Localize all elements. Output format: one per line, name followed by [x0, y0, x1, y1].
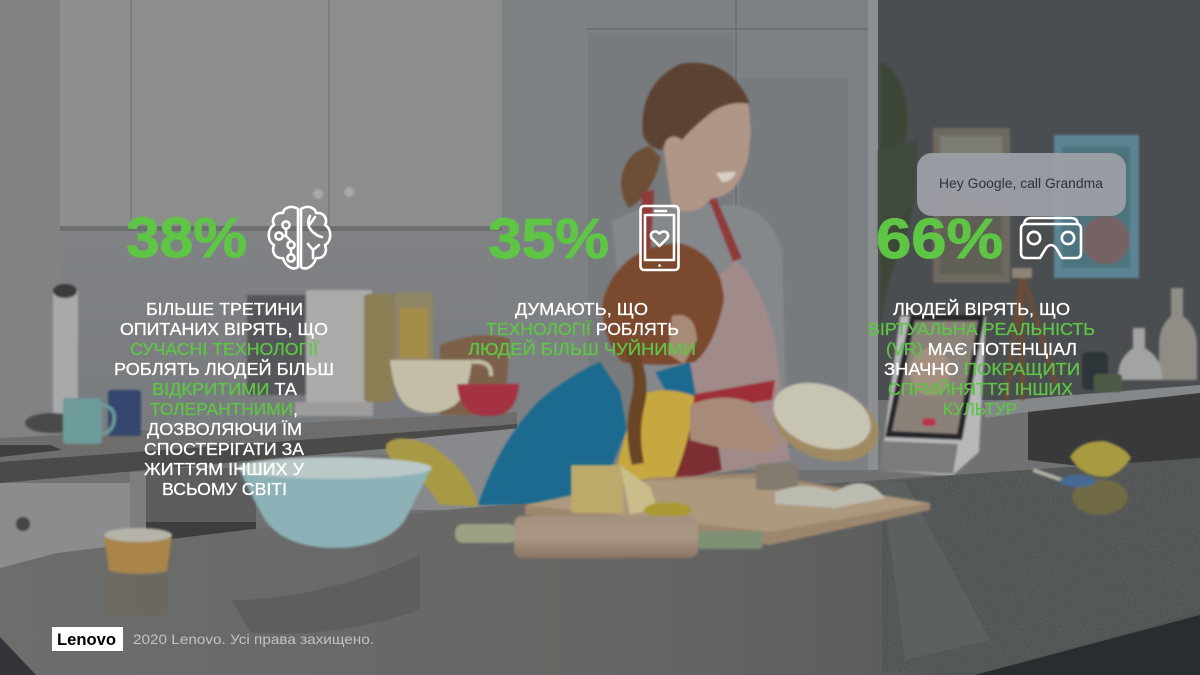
text block 3 [868, 298, 1095, 419]
text block 1: РОБЛЯТЬ ЛЮДЕЙ БІЛЬШ [114, 358, 334, 379]
icon: VR headset [1021, 218, 1081, 258]
arm and hand [690, 398, 780, 452]
text block 1: СУЧАСНІ ТЕХНОЛОГІЇ [130, 339, 318, 359]
stat column 2 [468, 206, 696, 359]
stat column 3 [868, 207, 1095, 419]
speech bubble: Hey Google [917, 153, 1126, 216]
mitten [386, 438, 478, 506]
text block 2 [468, 299, 696, 359]
neck and face [664, 80, 751, 211]
apron [675, 260, 790, 480]
girl [386, 243, 780, 506]
red bowl [457, 384, 519, 416]
stat column 1 [114, 206, 334, 499]
face [668, 315, 697, 364]
spoon [1033, 470, 1096, 487]
rolling pin [455, 516, 763, 558]
footer: Lenovo logo [52, 627, 123, 651]
white mixing bowl [390, 360, 491, 413]
coffee maker [247, 290, 373, 416]
paper towel holder [25, 284, 79, 433]
granite texture [882, 458, 1200, 672]
wall art and plant [878, 62, 1139, 330]
text block 1: БІЛЬШЕ ТРЕТИНИ [146, 299, 303, 319]
hair [642, 63, 750, 150]
text block 1: ДОЗВОЛЯЮЧИ ЇМ [147, 419, 302, 439]
back of scene objects [16, 62, 1197, 531]
braid [622, 345, 647, 465]
number: 35%: 35% [488, 207, 609, 271]
footer: copyright text: 2020 Lenovo. Усі права захищено. [133, 631, 374, 647]
text block 1: СПОСТЕРІГАТИ ЗА [144, 439, 304, 459]
text block 3: ВІРТУАЛЬНА РЕАЛЬНІСТЬ [868, 319, 1095, 339]
ramekin [104, 528, 172, 574]
apron straps [640, 190, 654, 270]
mugs [63, 390, 141, 444]
smile [716, 172, 736, 182]
counter-top objects [104, 441, 1131, 574]
text block 1: ОПИТАНИХ ВІРЯТЬ, ЩО [120, 319, 328, 339]
island counter [0, 458, 1200, 675]
smart display [880, 315, 986, 476]
cape [478, 362, 627, 505]
cutting board [525, 473, 930, 545]
footer: Lenovo logo: Lenovo [57, 630, 116, 649]
number: 38%: 38% [126, 206, 247, 270]
dough scraps [775, 483, 885, 508]
text block 2: ЛЮДЕЙ БІЛЬШ ЧУЙНИМИ [468, 338, 696, 359]
teal bowl [238, 457, 432, 548]
text block 3: СПРИЙНЯТТЯ ІНШИХ [888, 378, 1073, 399]
text block 1 [114, 299, 334, 499]
text block 3: ЗНАЧНО ПОКРАЩИТИ [884, 359, 1080, 379]
text block 3: ЛЮДЕЙ ВІРЯТЬ, ЩО [893, 298, 1070, 319]
text block 1: ТОЛЕРАНТНИМИ, [150, 399, 298, 419]
metal cup [756, 464, 798, 490]
text block 1: ВСЬОМУ СВІТІ [162, 479, 287, 499]
text block 3: (VR) МАЄ ПОТЕНЦІАЛ [886, 339, 1077, 359]
shirt [612, 205, 786, 420]
small lemon [644, 502, 692, 518]
vases [1082, 288, 1197, 392]
text block 1: ЖИТТЯМ ІНШИХ У [144, 459, 305, 479]
woman [612, 63, 790, 484]
reflection lemon [1072, 479, 1128, 515]
speech bubble: Hey Google: Hey Google, call Grandma [939, 176, 1104, 191]
butter block [571, 465, 658, 514]
icon: phone with heart [640, 206, 678, 270]
cutting board behind [440, 335, 510, 415]
text block 2: ДУМАЮТЬ, ЩО [515, 299, 648, 319]
text block 1: ВІДКРИТИМИ ТА [152, 379, 297, 399]
text block 2: ТЕХНОЛОГІЇ РОБЛЯТЬ [486, 319, 679, 339]
jars [364, 292, 433, 402]
tripod lamp [1006, 268, 1056, 400]
icon: brain circuit [269, 207, 330, 268]
pie dough [764, 371, 888, 474]
number: 66%: 66% [876, 207, 1003, 271]
hair [603, 243, 724, 365]
text block 3: КУЛЬТУР [943, 399, 1017, 419]
dress [610, 390, 694, 490]
lemon [1070, 441, 1131, 477]
